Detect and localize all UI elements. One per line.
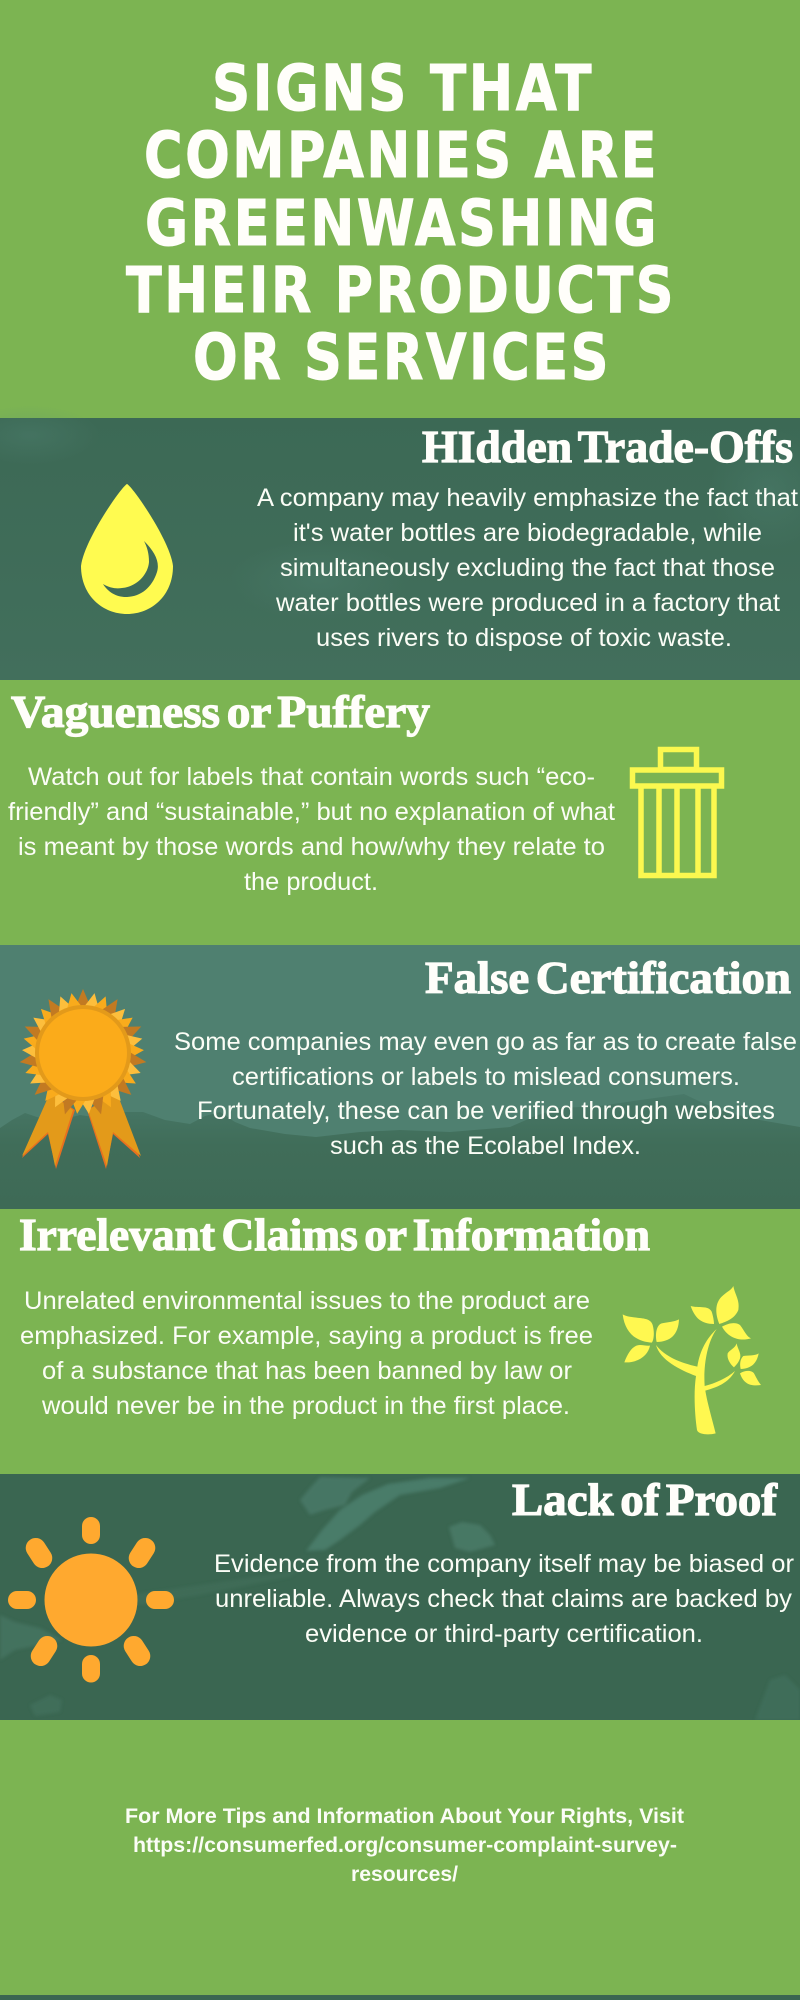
icon: sun — [8, 1517, 174, 1682]
text: footer link: For More Tips and Information About Your Rights, Visit — [125, 1805, 684, 1828]
text: irrelevant claims: emphasized. For example, saying a product is free — [20, 1322, 593, 1350]
panel: hidden trade-offs — [0, 405, 800, 680]
text: irrelevant claims: would never be in the product in the first place. — [41, 1392, 570, 1420]
panel: false certification — [0, 945, 800, 1209]
heading: irrelevant claims: Irrelevant Claims or Information — [19, 1209, 650, 1260]
text: false certification: certifications or labels to mislead consumers. — [232, 1063, 740, 1091]
text: false certification: such as the Ecolabel Index. — [330, 1132, 641, 1160]
heading: vagueness or puffery: Vagueness or Puffery — [11, 686, 430, 737]
panel: vagueness or puffery — [0, 680, 800, 945]
title: COMPANIES ARE — [144, 119, 659, 192]
text: hidden trade-offs: it's water bottles are biodegradable, while — [293, 519, 762, 547]
text: irrelevant claims — [20, 1287, 593, 1420]
panel: lack of proof — [0, 1474, 800, 1720]
title — [126, 52, 676, 394]
text: hidden trade-offs: A company may heavily emphasize the fact that — [257, 484, 798, 512]
heading: lack of proof: Lack of Proof — [512, 1474, 778, 1525]
heading: false certification: False Certification — [425, 952, 791, 1003]
text: hidden trade-offs: water bottles were produced in a factory that — [275, 589, 780, 617]
text: footer link: resources/ — [351, 1863, 458, 1886]
title: OR SERVICES — [193, 321, 611, 394]
text: vagueness or puffery — [8, 763, 615, 896]
text: lack of proof: unreliable. Always check that claims are backed by — [215, 1585, 793, 1613]
text: vagueness or puffery: friendly” and “sustainable,” but no explanation of what — [8, 798, 615, 826]
text: irrelevant claims: of a substance that has been banned by law or — [42, 1357, 572, 1385]
icon: trash can — [632, 750, 722, 876]
text: vagueness or puffery: is meant by those words and how/why they relate to — [18, 833, 605, 861]
text: lack of proof: evidence or third-party certification. — [305, 1620, 703, 1648]
text: vagueness or puffery: Watch out for labels that contain words such “eco- — [28, 763, 595, 791]
heading: hidden trade-offs: HIdden Trade-Offs — [422, 421, 793, 472]
panel: footer — [0, 1720, 800, 2000]
text: hidden trade-offs — [257, 484, 798, 652]
panel: irrelevant claims — [0, 1209, 800, 1475]
text: hidden trade-offs: uses rivers to dispose of toxic waste. — [316, 624, 732, 652]
text: hidden trade-offs: simultaneously excluding the fact that those — [280, 554, 775, 582]
text: footer link: https://consumerfed.org/consumer-complaint-survey- — [133, 1834, 677, 1857]
text: false certification — [174, 1028, 797, 1160]
text: false certification: Fortunately, these can be verified through websites — [197, 1097, 775, 1125]
text: lack of proof: Evidence from the company itself may be biased or — [214, 1550, 794, 1578]
panel: title — [0, 0, 800, 418]
text: irrelevant claims: Unrelated environmental issues to the product are — [24, 1287, 590, 1315]
title: GREENWASHING — [145, 187, 659, 260]
icon: water drop — [81, 484, 173, 614]
icon: award ribbon — [18, 989, 148, 1169]
text: lack of proof — [214, 1550, 794, 1648]
title: SIGNS THAT — [212, 52, 594, 125]
title: THEIR PRODUCTS — [126, 254, 676, 327]
icon: tree — [623, 1286, 761, 1434]
text: vagueness or puffery: the product. — [244, 868, 378, 896]
text: false certification: Some companies may even go as far as to create false — [174, 1028, 797, 1056]
text: footer link — [125, 1805, 684, 1886]
